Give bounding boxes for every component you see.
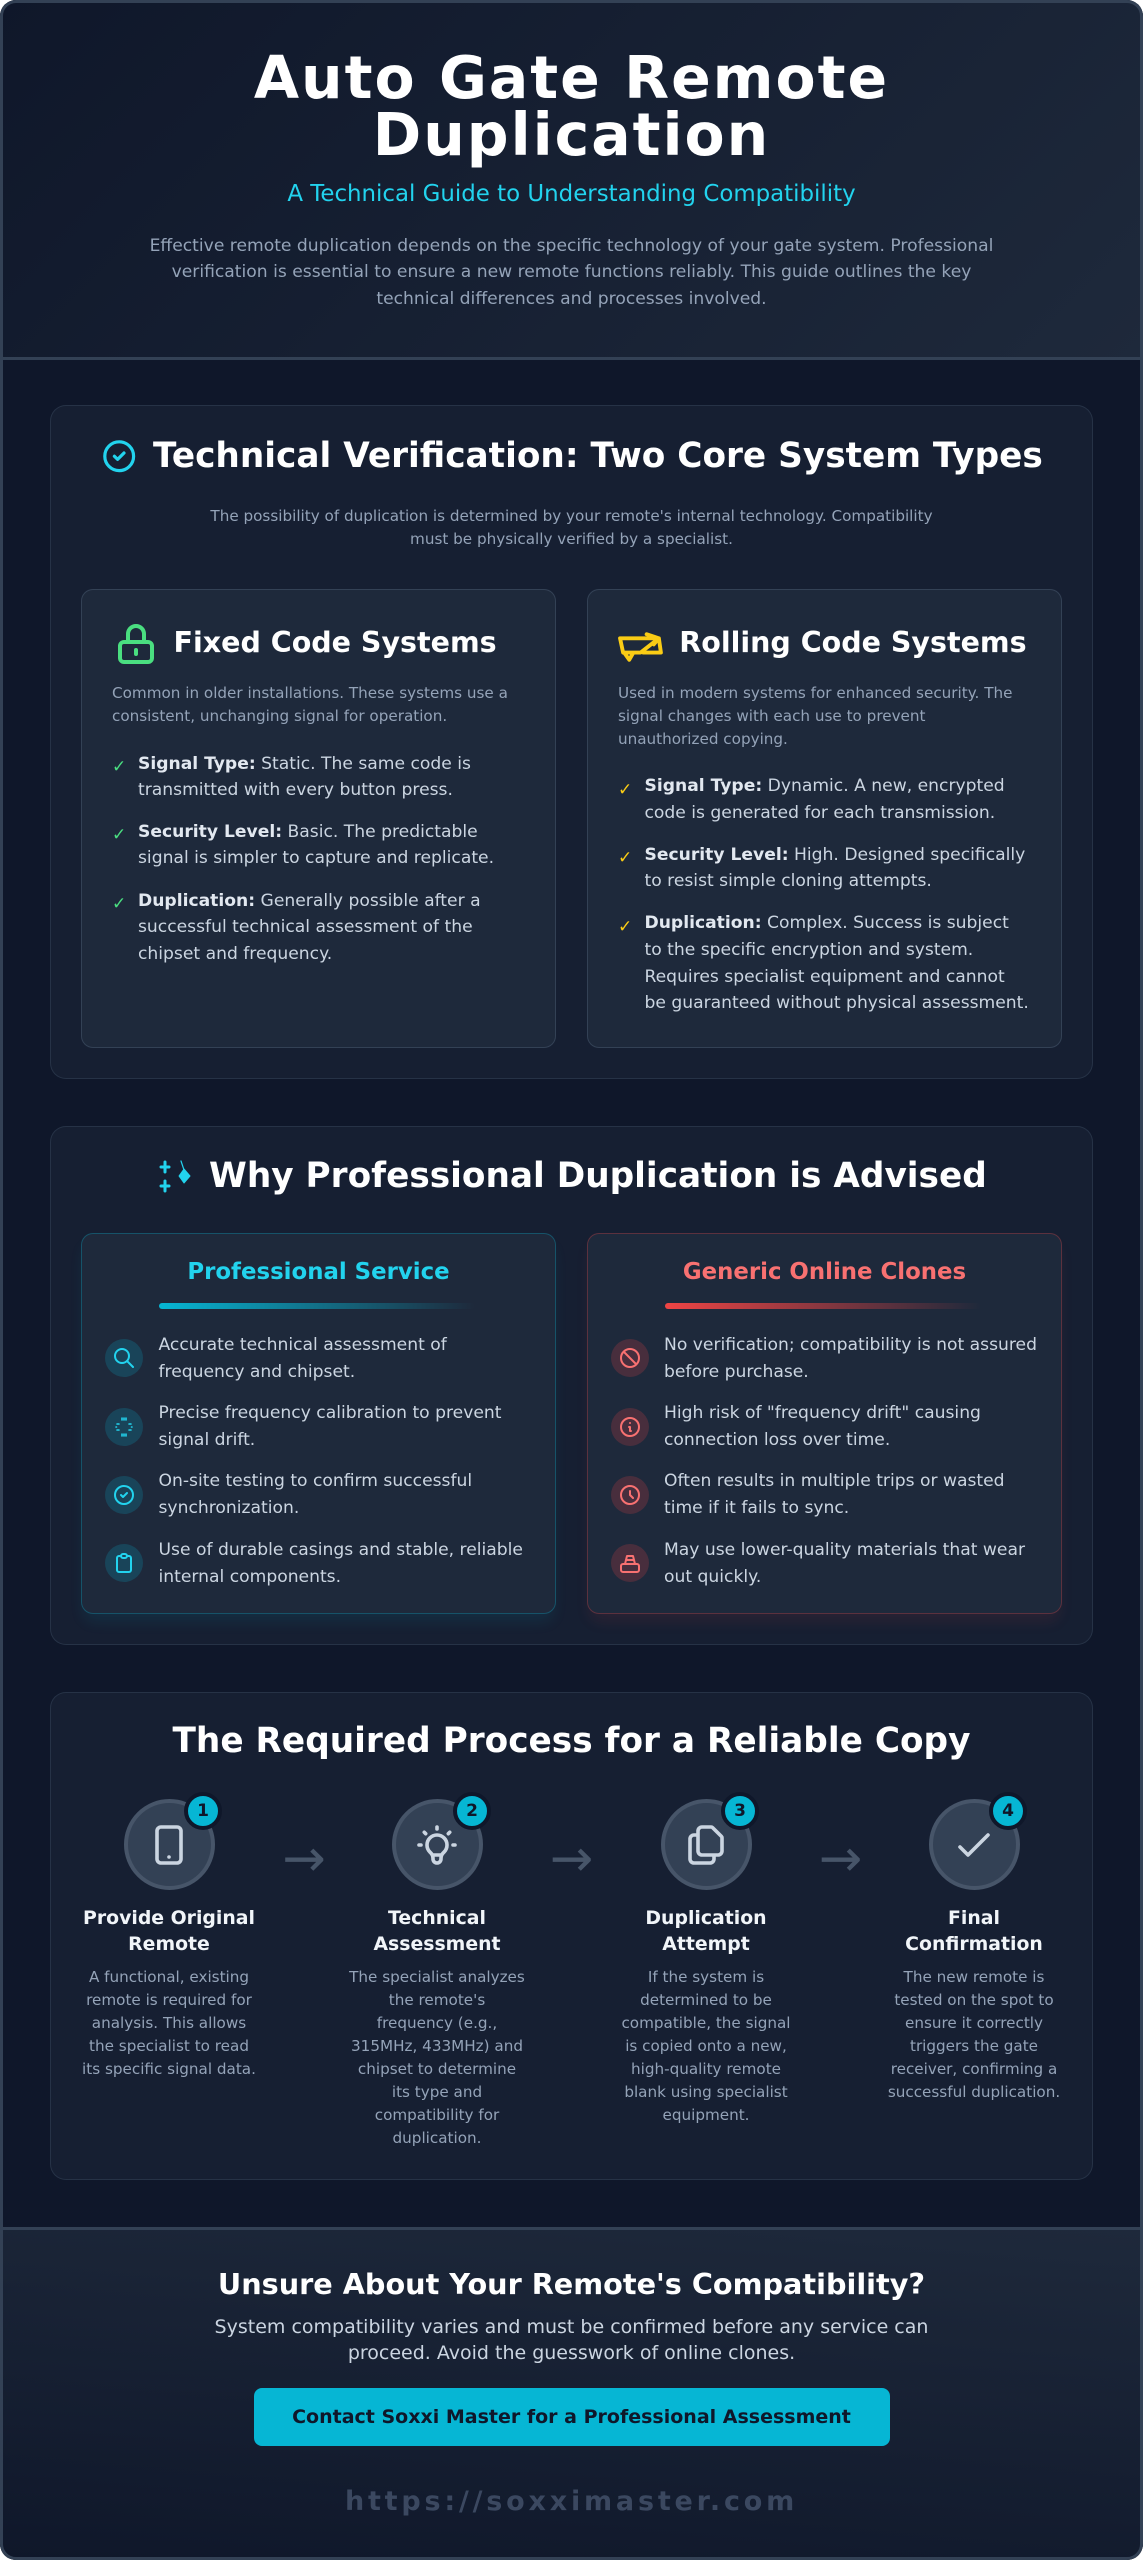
step title: Provide Original	[83, 1908, 255, 1928]
title: Auto Gate Remote	[254, 44, 889, 112]
step description	[82, 1968, 256, 2078]
step number	[721, 1792, 759, 1830]
step description: the specialist to read	[89, 2037, 249, 2055]
step description: The specialist analyzes	[349, 1968, 525, 1986]
icon: sparkles	[160, 1160, 190, 1192]
step description: frequency (e.g.,	[377, 2014, 497, 2032]
feature: security level: signal is simpler to capture and replicate.	[138, 848, 494, 868]
step description: its type and	[392, 2083, 482, 2101]
step description: tested on the spot to	[894, 1991, 1054, 2009]
feature: security level	[644, 845, 1025, 891]
website url: https://soxximaster.com	[345, 2486, 798, 2517]
step description: successful duplication.	[888, 2083, 1060, 2101]
step title	[645, 1908, 767, 1955]
feature: signal type	[138, 754, 471, 800]
step description: ensure it correctly	[905, 2014, 1043, 2032]
card description: signal changes with each use to prevent	[618, 706, 925, 724]
card: fixed code systems	[81, 589, 556, 1048]
step description: is copied onto a new,	[625, 2037, 787, 2055]
card: rolling code systems	[587, 589, 1062, 1048]
intro text	[150, 236, 993, 309]
intro text: Effective remote duplication depends on the specific technology of your gate system. Professional	[150, 236, 993, 256]
accent bar	[158, 1302, 474, 1308]
feature: signal type: code is generated for each transmission.	[644, 803, 995, 823]
risk text: time if it fails to sync.	[664, 1498, 849, 1518]
arrow: →	[819, 1829, 862, 1889]
risk text: Often results in multiple trips or wasted	[664, 1471, 1005, 1491]
arrow: →	[550, 1829, 593, 1889]
step description	[349, 1968, 525, 2147]
step description: triggers the gate	[910, 2037, 1038, 2055]
icon: check mark	[928, 1799, 1020, 1890]
section heading: Technical Verification: Two Core System Types	[153, 436, 1043, 476]
card description	[618, 684, 1012, 748]
title	[254, 44, 889, 169]
step description: determined to be	[640, 1991, 772, 2009]
section description	[210, 506, 933, 548]
icon: rolling code arrows	[618, 632, 663, 662]
check mark: ✓	[112, 757, 126, 777]
panel: required process	[50, 1692, 1093, 2180]
title: Duplication	[373, 101, 770, 169]
step description: duplication.	[393, 2129, 481, 2147]
benefit text	[158, 1471, 472, 1518]
intro text: verification is essential to ensure a new remote functions reliably. This guide outlines the key	[172, 262, 971, 282]
section heading: The Required Process for a Reliable Copy	[173, 1721, 970, 1761]
step description: equipment.	[662, 2106, 750, 2124]
feature: signal type	[644, 776, 1005, 823]
icon: copy documents	[660, 1799, 752, 1890]
step title: Duplication	[645, 1908, 767, 1928]
arrow: →	[282, 1829, 326, 1889]
step number	[453, 1792, 491, 1830]
feature: security level: Security Level: High. Designed specifically	[644, 845, 1025, 865]
benefit text: On-site testing to confirm successful	[158, 1471, 472, 1491]
feature: duplication: chipset and frequency.	[138, 944, 332, 964]
footer heading: Unsure About Your Remote's Compatibility?	[218, 2267, 925, 2301]
step number: 1	[197, 1801, 209, 1821]
feature: duplication	[138, 891, 481, 964]
step description: blank using specialist	[624, 2083, 788, 2101]
footer call to action	[0, 2227, 1143, 2560]
card heading: Rolling Code Systems	[679, 626, 1027, 659]
step description: chipset to determine	[358, 2060, 516, 2078]
risk text	[664, 1403, 981, 1450]
check mark: ✓	[112, 825, 126, 845]
step number	[989, 1792, 1027, 1830]
benefit text: frequency and chipset.	[158, 1362, 355, 1382]
check mark: ✓	[618, 917, 632, 937]
panel: technical verification	[50, 405, 1093, 1079]
step title: Attempt	[662, 1934, 750, 1955]
risk text	[664, 1540, 1026, 1587]
risk text: High risk of "frequency drift" causing	[664, 1403, 981, 1423]
step number: 2	[466, 1801, 478, 1821]
feature: security level: Security Level: Basic. The predictable	[138, 822, 478, 842]
feature: duplication: be guaranteed without physical assessment.	[644, 993, 1029, 1013]
step title	[373, 1908, 501, 1955]
feature: signal type: Signal Type: Static. The same code is	[138, 754, 471, 774]
icon: light bulb	[392, 1799, 482, 1890]
card description: Common in older installations. These systems use a	[112, 684, 508, 702]
benefit text: signal drift.	[158, 1430, 255, 1450]
header banner	[0, 0, 1143, 360]
benefit text: Accurate technical assessment of	[158, 1335, 447, 1355]
check mark: ✓	[618, 780, 632, 800]
step description: high-quality remote	[631, 2060, 781, 2078]
step description	[888, 1968, 1060, 2101]
feature: duplication: to the specific encryption and system.	[644, 940, 973, 960]
icon: info	[611, 1408, 649, 1446]
risk text: May use lower-quality materials that wear	[664, 1540, 1025, 1560]
card description: unauthorized copying.	[618, 730, 788, 748]
step title	[905, 1908, 1043, 1955]
benefit text: internal components.	[158, 1567, 341, 1587]
icon: material tray	[611, 1544, 649, 1582]
feature: signal type: Signal Type: Dynamic. A new, encrypted	[644, 776, 1005, 796]
feature: duplication: successful technical assessment of the	[138, 917, 473, 937]
icon: clock	[611, 1476, 649, 1514]
check mark: ✓	[112, 894, 126, 914]
step number	[184, 1792, 222, 1830]
step title: Technical	[388, 1908, 486, 1928]
risk text: out quickly.	[664, 1567, 761, 1587]
step description: receiver, confirming a	[891, 2060, 1057, 2078]
icon: clipboard	[105, 1544, 143, 1582]
feature: security level	[138, 822, 494, 868]
benefit text	[158, 1335, 448, 1382]
risk text	[664, 1471, 1005, 1518]
step description: compatible, the signal	[621, 2014, 791, 2032]
feature: signal type: transmitted with every button press.	[138, 780, 453, 800]
step description: 315MHz, 433MHz) and	[351, 2037, 523, 2055]
card heading: Professional Service	[187, 1259, 450, 1285]
check mark: ✓	[618, 848, 632, 868]
card description	[112, 684, 508, 724]
step title: Assessment	[373, 1934, 501, 1955]
benefit text: Use of durable casings and stable, reliable	[158, 1540, 523, 1560]
section heading: Why Professional Duplication is Advised	[209, 1156, 987, 1196]
section description: must be physically verified by a specialist.	[410, 530, 733, 548]
step description: analysis. This allows	[92, 2014, 246, 2032]
contact button	[254, 2388, 890, 2446]
icon: prohibited	[611, 1339, 649, 1377]
feature: duplication: Duplication: Complex. Success is subject	[644, 913, 1009, 933]
step number: 4	[1002, 1801, 1014, 1821]
benefit text: Precise frequency calibration to prevent	[158, 1403, 501, 1423]
feature: duplication	[644, 913, 1029, 1013]
risk text	[664, 1335, 1037, 1382]
card description: consistent, unchanging signal for operation.	[112, 706, 447, 724]
risk text: before purchase.	[664, 1362, 809, 1382]
footer text: System compatibility varies and must be confirmed before any service can	[215, 2316, 928, 2338]
footer text: proceed. Avoid the guesswork of online clones.	[348, 2342, 795, 2364]
feature: duplication: Duplication: Generally possible after a	[138, 891, 481, 911]
icon: check circle	[103, 440, 136, 472]
icon: padlock	[118, 624, 154, 664]
benefit text	[158, 1540, 523, 1587]
panel: why professional duplication	[50, 1126, 1093, 1645]
step 4	[888, 1792, 1060, 2101]
footer text	[215, 2316, 928, 2364]
step title: Final	[948, 1908, 1000, 1928]
benefit text	[158, 1403, 502, 1450]
contact button: Contact Soxxi Master for a Professional Assessment	[292, 2406, 851, 2428]
section description: The possibility of duplication is determined by your remote's internal technology. Compatibility	[210, 506, 933, 524]
benefit text: synchronization.	[158, 1498, 299, 1518]
step description: its specific signal data.	[82, 2060, 256, 2078]
feature: security level: to resist simple cloning attempts.	[644, 871, 932, 891]
step 1	[82, 1794, 256, 2078]
step description: compatibility for	[375, 2106, 499, 2124]
risk text: connection loss over time.	[664, 1430, 890, 1450]
step title: Remote	[128, 1934, 210, 1955]
step description: A functional, existing	[89, 1968, 249, 1986]
card heading: Generic Online Clones	[683, 1259, 966, 1285]
step description: The new remote is	[904, 1968, 1044, 1986]
icon: check circle	[105, 1476, 143, 1514]
step title	[83, 1908, 255, 1955]
intro text: technical differences and processes involved.	[376, 289, 767, 309]
card description: Used in modern systems for enhanced security. The	[618, 684, 1012, 702]
step 2	[349, 1794, 525, 2147]
subtitle: A Technical Guide to Understanding Compatibility	[287, 181, 856, 207]
card: professional service	[81, 1233, 556, 1614]
accent bar	[664, 1302, 980, 1308]
feature: duplication: Requires specialist equipment and cannot	[644, 967, 1005, 987]
icon: calibration dashes	[105, 1408, 143, 1446]
card: generic online clones	[587, 1233, 1062, 1614]
step number: 3	[734, 1801, 746, 1821]
step description: remote is required for	[86, 1991, 252, 2009]
step description: the remote's	[389, 1991, 485, 2009]
step description: If the system is	[648, 1968, 764, 1986]
step title: Confirmation	[905, 1934, 1043, 1955]
step description	[621, 1968, 791, 2124]
card heading: Fixed Code Systems	[174, 626, 497, 659]
icon: remote device	[124, 1799, 214, 1890]
icon: magnifier	[105, 1339, 143, 1377]
step 3	[621, 1794, 791, 2124]
risk text: No verification; compatibility is not assured	[664, 1335, 1037, 1355]
